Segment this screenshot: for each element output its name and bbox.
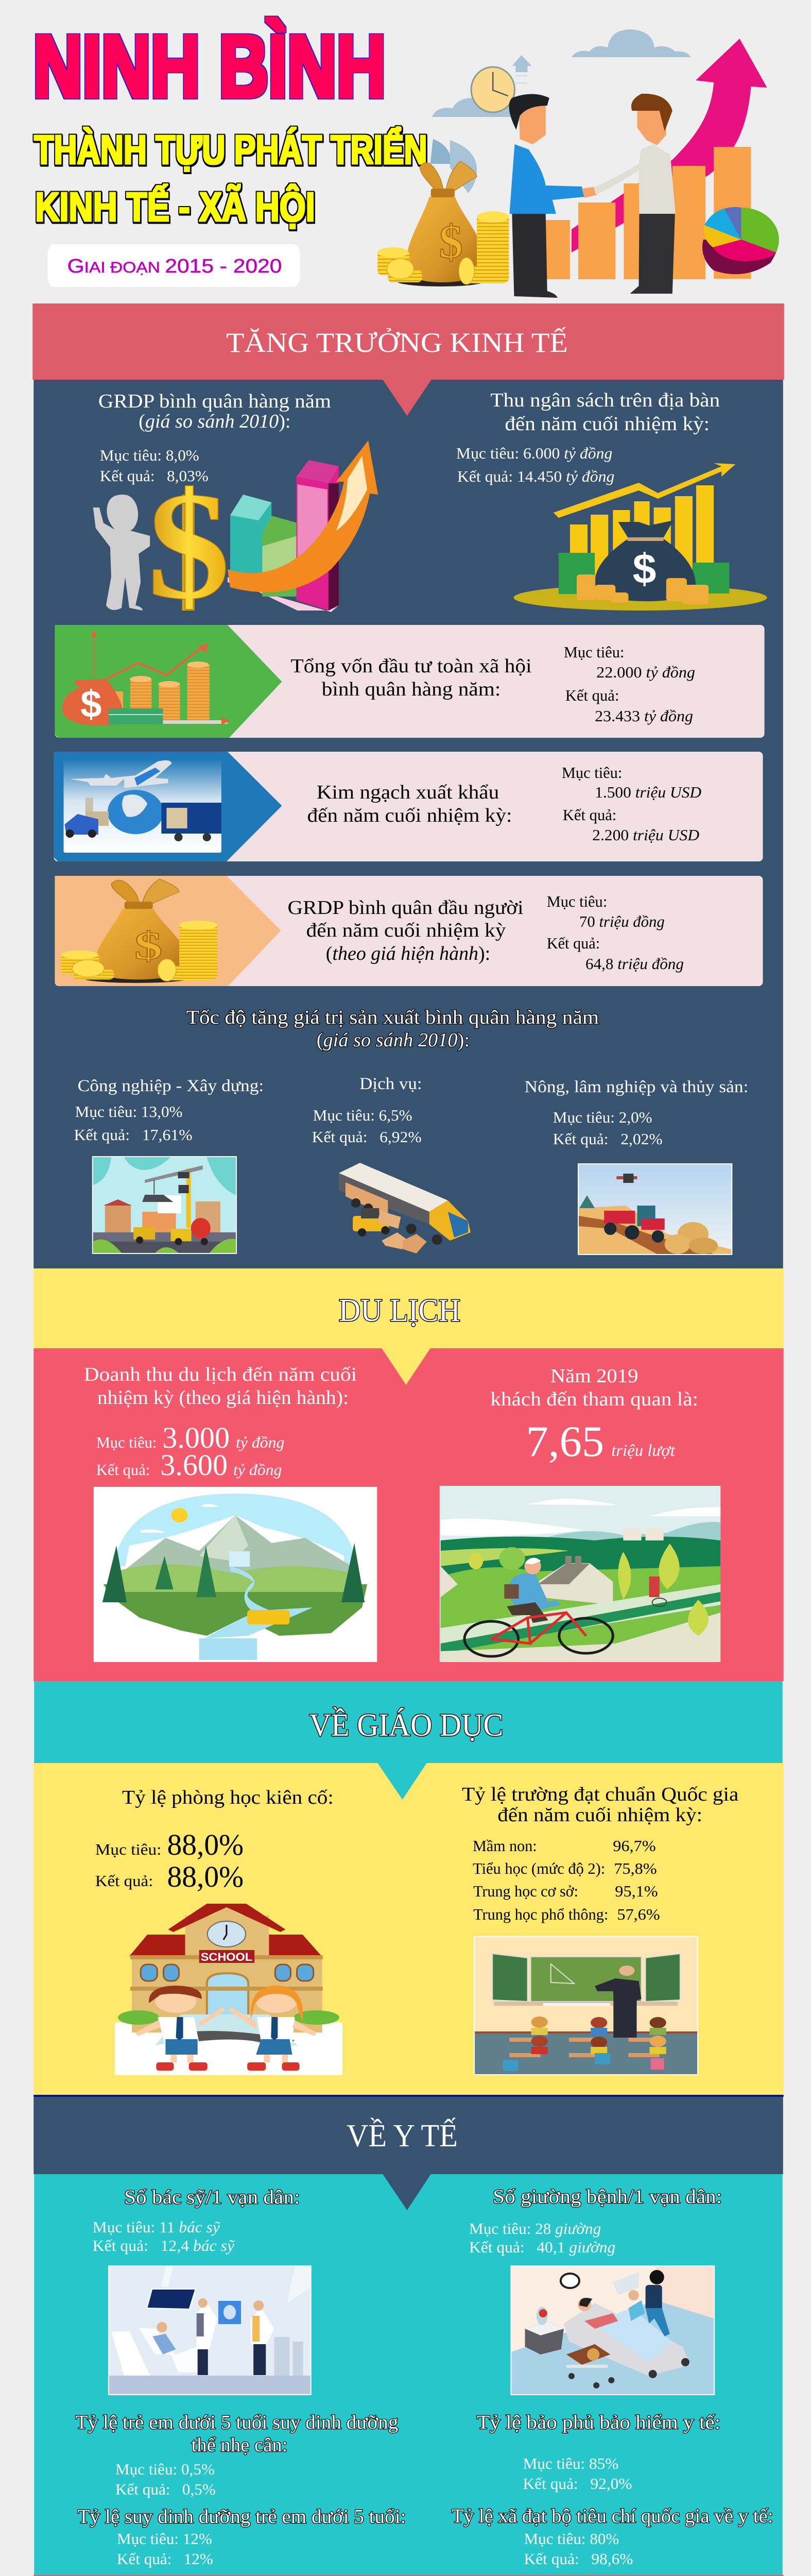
block: khách tham quan: Năm 2019	[550, 1365, 639, 1387]
icon: delivery truck and forklift	[339, 1163, 471, 1253]
block: trường đạt chuẩn: Tỷ lệ trường đạt chuẩn Quốc gia	[462, 1784, 738, 1805]
card values: Mục tiêu:	[562, 764, 622, 782]
card values: Kết quả:	[547, 934, 600, 952]
card values	[547, 892, 684, 973]
block: trường đạt chuẩn: 57,6%	[617, 1905, 660, 1923]
section title: VỀ GIÁO DỤC	[309, 1707, 503, 1743]
block: khách tham quan: triệu lượt	[611, 1442, 676, 1460]
section header band	[34, 1681, 783, 1763]
block: xã đạt tiêu chí y tế: Mục tiêu: 80%	[524, 2530, 619, 2548]
block: suy dinh dưỡng trẻ em: Mục tiêu: 12%	[117, 2530, 212, 2548]
block: số bác sỹ: Mục tiêu: 11 bác sỹ	[93, 2218, 220, 2236]
block: suy dinh dưỡng thể nhẹ cân: Mục tiêu: 0,5%	[115, 2460, 215, 2478]
block: doanh thu du lịch: nhiệm kỳ (theo giá hiện hành):	[97, 1387, 349, 1409]
block: khách tham quan	[490, 1365, 698, 1466]
block: suy dinh dưỡng thể nhẹ cân: Tỷ lệ trẻ em dưới 5 tuổi suy dinh dưỡng	[76, 2412, 398, 2433]
panel: red body	[33, 1348, 784, 1681]
block: bảo hiểm y tế: Kết quả: 92,0%	[523, 2475, 632, 2493]
image: cyclist in countryside	[440, 1486, 720, 1662]
icon: investment growth	[62, 630, 230, 725]
block: xã đạt tiêu chí y tế: Kết quả: 98,6%	[524, 2550, 633, 2568]
block: GRDP bình quân hàng năm	[98, 391, 331, 485]
block: trường đạt chuẩn: Mầm non:	[473, 1837, 537, 1855]
block: xã đạt tiêu chí y tế	[452, 2505, 773, 2568]
column: Dịch vụ: Mục tiêu: 6,5%	[313, 1106, 412, 1124]
panel: yellow body	[33, 1763, 784, 2095]
header pointer	[377, 1763, 427, 1800]
block: trường đạt chuẩn: 95,1%	[615, 1882, 658, 1900]
card: GRDP bình quân đầu người	[55, 876, 763, 986]
block: khách tham quan: khách đến tham quan là:	[490, 1388, 698, 1410]
block: doanh thu du lịch: tỷ đồng	[233, 1461, 282, 1479]
section title: TĂNG TRƯỞNG KINH TẾ	[226, 327, 568, 358]
column: Nông, lâm nghiệp và thủy sản: Mục tiêu: 2,0%	[553, 1108, 652, 1126]
block: bảo hiểm y tế	[477, 2412, 720, 2493]
title: Ninh Bình: NINH BÌNH	[33, 16, 386, 116]
card values: 23.433 tỷ đồng	[595, 707, 693, 725]
subheading: tốc độ tăng: (giá so sánh 2010):	[317, 1029, 470, 1051]
block: phòng học kiên cố	[95, 1787, 334, 1893]
column: Dịch vụ	[312, 1075, 422, 1146]
block: số giường bệnh: Mục tiêu: 28 giường	[469, 2219, 601, 2238]
block: số bác sỹ: Số bác sỹ/1 vạn dân:	[124, 2187, 300, 2208]
illustration: man with dollar and growth bars	[93, 440, 378, 632]
panel: teal body	[34, 2174, 783, 2575]
divider line	[33, 2095, 784, 2097]
block: doanh thu du lịch: 3.000	[162, 1421, 230, 1454]
card values: 22.000 tỷ đồng	[596, 663, 695, 681]
block: trường đạt chuẩn: Trung học cơ sở:	[473, 1882, 578, 1900]
illustration: man with dollar and growth bars: $	[147, 461, 230, 632]
card: Tổng vốn đầu tư	[55, 625, 765, 738]
section header band	[32, 303, 784, 380]
card values: Mục tiêu:	[564, 643, 624, 661]
block: xã đạt tiêu chí y tế: Tỷ lệ xã đạt bộ tiêu chí quốc gia về y tế:	[452, 2505, 773, 2527]
section header band	[33, 1268, 784, 1348]
card: GRDP bình quân đầu người: đến năm cuối nhiệm kỳ	[306, 920, 506, 941]
block: GRDP bình quân hàng năm: (giá so sánh 2010):	[139, 411, 291, 432]
block: trường đạt chuẩn: 96,7%	[613, 1837, 656, 1855]
subtitle line 1: THÀNH TỰU PHÁT TRIỂN	[34, 126, 427, 173]
column: Nông, lâm nghiệp và thủy sản: Nông, lâm nghiệp và thủy sản:	[525, 1078, 748, 1096]
section: Lao động, việc làm, giảm nghèo	[33, 2575, 784, 2576]
section title: DU LỊCH	[339, 1293, 460, 1328]
image: classroom	[474, 1936, 698, 2075]
block: số bác sỹ	[93, 2187, 300, 2255]
section: Du lịch	[33, 1268, 784, 1681]
card values: Kết quả:	[563, 806, 616, 824]
header	[33, 16, 779, 298]
block: suy dinh dưỡng thể nhẹ cân: Kết quả: 0,5%	[115, 2480, 216, 2498]
block: GRDP bình quân hàng năm: Mục tiêu: 8,0%	[100, 446, 199, 464]
icon: investment growth: $	[80, 683, 101, 725]
card text: Tổng vốn đầu tư toàn xã hội	[291, 655, 532, 677]
section header band	[33, 2575, 784, 2576]
card text: GRDP bình quân đầu người	[287, 897, 524, 919]
card values: Mục tiêu:	[547, 892, 607, 910]
image: doctors and patient	[108, 2265, 312, 2395]
illustration: school and children	[115, 1904, 342, 2075]
block: doanh thu du lịch: 3.600	[160, 1448, 228, 1482]
card values: 70 triệu đồng	[579, 912, 665, 930]
block: số giường bệnh: Kết quả: 40,1 giường	[469, 2238, 615, 2256]
image: construction site	[92, 1156, 237, 1254]
block: Thu ngân sách: Mục tiêu: 6.000 tỷ đồng	[456, 444, 612, 462]
icon: gold money bag	[61, 879, 217, 983]
card values: 1.500 triệu USD	[595, 783, 701, 801]
section title: VỀ Y TẾ	[347, 2118, 458, 2154]
block: phòng học kiên cố: Tỷ lệ phòng học kiên cố:	[122, 1787, 334, 1808]
period badge	[47, 244, 300, 287]
block: số giường bệnh	[469, 2186, 722, 2256]
illustration: money bag and bars: $	[633, 546, 656, 592]
block: trường đạt chuẩn: đến năm cuối nhiệm kỳ:	[497, 1804, 702, 1826]
column: Dịch vụ: Kết quả: 6,92%	[312, 1128, 422, 1146]
header pointer	[383, 380, 432, 416]
column: Dịch vụ: Dịch vụ:	[359, 1075, 422, 1093]
block: suy dinh dưỡng trẻ em: Tỷ lệ suy dinh dưỡng trẻ em dưới 5 tuổi:	[78, 2506, 406, 2528]
card text: Kim ngạch xuất khẩu	[317, 782, 499, 803]
block: trường đạt chuẩn: Trung học phổ thông:	[473, 1905, 608, 1923]
block: doanh thu du lịch	[84, 1364, 357, 1482]
block: phòng học kiên cố: Kết quả:	[95, 1872, 153, 1890]
block: doanh thu du lịch: Doanh thu du lịch đến năm cuối	[84, 1364, 357, 1385]
column: Công nghiệp - Xây dựng: Mục tiêu: 13,0%	[75, 1103, 183, 1121]
block: Thu ngân sách: Thu ngân sách trên địa bàn	[490, 389, 720, 411]
block: suy dinh dưỡng trẻ em	[78, 2506, 406, 2568]
block: doanh thu du lịch: tỷ đồng	[236, 1433, 284, 1451]
block: bảo hiểm y tế: Tỷ lệ bảo phủ bảo hiểm y tế:	[477, 2412, 720, 2433]
section header band	[33, 2095, 783, 2174]
block: Thu ngân sách: Kết quả: 14.450 tỷ đồng	[457, 467, 614, 485]
period badge: GIAI ĐOẠN 2015 - 2020	[67, 256, 282, 277]
image: hospital bed	[510, 2265, 715, 2395]
block: phòng học kiên cố: 88,0%	[167, 1860, 244, 1893]
section: Tăng trưởng kinh tế	[32, 303, 784, 1268]
block: GRDP bình quân hàng năm: Kết quả: 8,03%	[100, 467, 209, 485]
card values: Kết quả:	[565, 686, 619, 704]
block: trường đạt chuẩn: 75,8%	[614, 1859, 657, 1877]
block: bảo hiểm y tế: Mục tiêu: 85%	[523, 2454, 618, 2472]
card: Kim ngạch xuất khẩu	[54, 752, 763, 861]
image: mountain landscape	[94, 1487, 377, 1662]
card values	[564, 643, 695, 725]
header pointer	[382, 1348, 430, 1385]
section: Về y tế	[33, 2095, 784, 2575]
card values: 2.200 triệu USD	[592, 826, 699, 844]
illustration: handshake, money and growth	[377, 29, 779, 298]
illustration: money bag and bars	[513, 463, 767, 611]
block: GRDP bình quân hàng năm: GRDP bình quân hàng năm	[98, 391, 331, 412]
block: số bác sỹ: Kết quả: 12,4 bác sỹ	[93, 2236, 235, 2255]
block: trường đạt chuẩn	[462, 1784, 738, 1923]
subheading: tốc độ tăng: Tốc độ tăng giá trị sản xuất bình quân hàng năm	[186, 1007, 599, 1028]
image: tractor on farm	[578, 1163, 732, 1255]
section: Về giáo dục	[33, 1681, 784, 2095]
card: Tổng vốn đầu tư: bình quân hàng năm:	[322, 679, 501, 700]
column: Công nghiệp - Xây dựng: Công nghiệp - Xây dựng:	[78, 1077, 264, 1095]
block: suy dinh dưỡng thể nhẹ cân: thể nhẹ cân:	[192, 2434, 287, 2456]
block: doanh thu du lịch: Mục tiêu:	[96, 1433, 157, 1451]
illustration: school and children: SCHOOL	[201, 1951, 252, 1963]
block: số giường bệnh: Số giường bệnh/1 vạn dân:	[493, 2186, 722, 2208]
block: suy dinh dưỡng trẻ em: Kết quả: 12%	[117, 2550, 213, 2568]
column: Nông, lâm nghiệp và thủy sản: Kết quả: 2,02%	[553, 1130, 663, 1148]
dark panel	[33, 380, 783, 1268]
block: Thu ngân sách: đến năm cuối nhiệm kỳ:	[505, 413, 710, 435]
block: phòng học kiên cố: Mục tiêu:	[95, 1840, 161, 1858]
column: Nông, lâm nghiệp và thủy sản	[525, 1078, 748, 1148]
column: Công nghiệp - Xây dựng: Kết quả: 17,61%	[74, 1126, 193, 1144]
card: GRDP bình quân đầu người: (theo giá hiện hành):	[326, 943, 490, 964]
column: Công nghiệp - Xây dựng	[74, 1077, 264, 1144]
block: phòng học kiên cố: 88,0%	[167, 1828, 244, 1861]
block: suy dinh dưỡng thể nhẹ cân	[76, 2412, 398, 2498]
card values: 64,8 triệu đồng	[585, 955, 684, 973]
card: Kim ngạch xuất khẩu: đến năm cuối nhiệm kỳ:	[307, 805, 512, 826]
block: khách tham quan: 7,65	[526, 1417, 604, 1466]
block: Thu ngân sách	[456, 389, 720, 485]
block: trường đạt chuẩn: Tiểu học (mức độ 2):	[473, 1859, 605, 1877]
subtitle line 2: KINH TẾ - XÃ HỘI	[35, 183, 315, 230]
header pointer	[383, 2174, 431, 2210]
block: doanh thu du lịch: Kết quả:	[96, 1461, 150, 1479]
icon: export plane, globe and truck	[64, 759, 221, 853]
subheading: tốc độ tăng	[186, 1007, 599, 1051]
card values	[562, 764, 701, 844]
